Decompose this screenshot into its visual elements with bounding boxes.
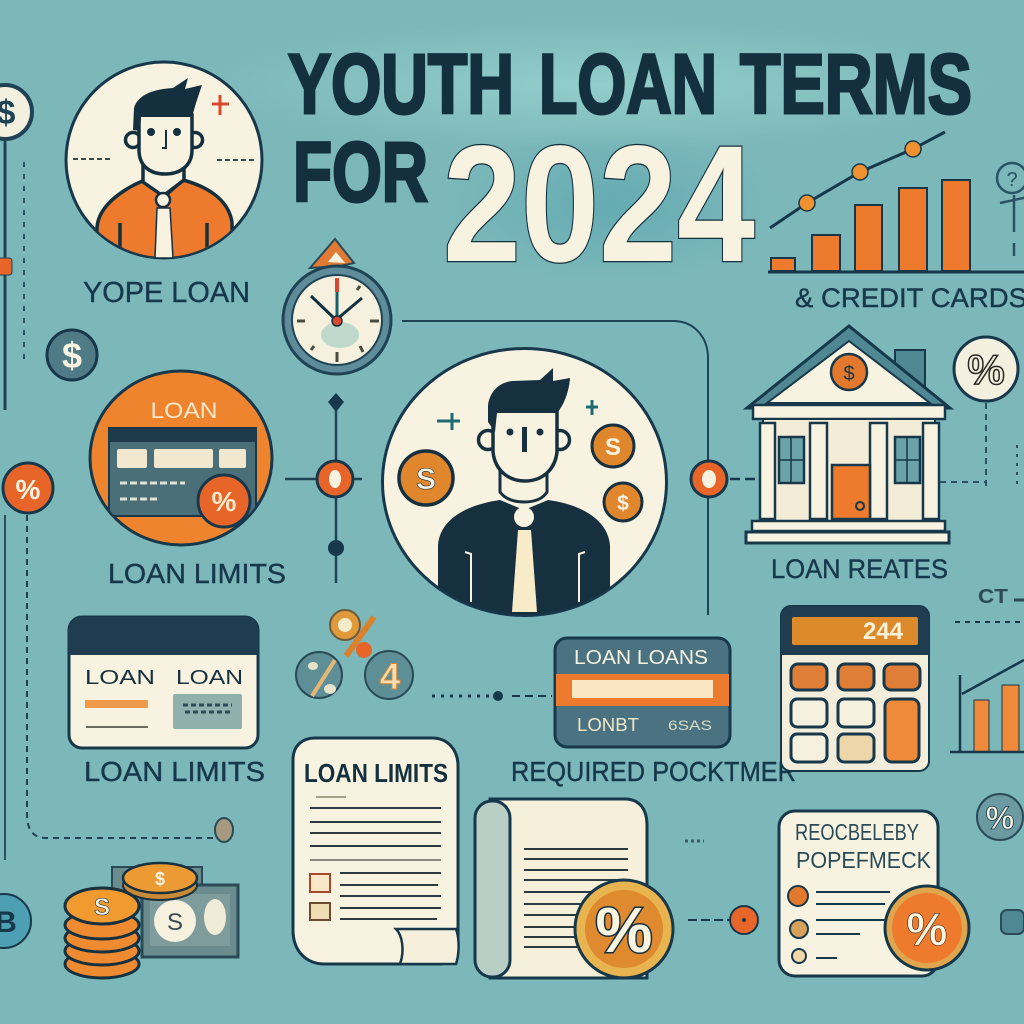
panel: loan table card: [69, 617, 258, 748]
icon: calculator: [781, 606, 929, 771]
icon: percent circle: %: [967, 346, 1005, 393]
panel: loan limits document: [293, 738, 459, 964]
icon: dollar badge: [0, 85, 32, 139]
icon: clock: [283, 239, 391, 374]
icon: bank building: [746, 326, 950, 543]
icon: coins and cash: $: [155, 869, 165, 889]
timeline node: [285, 393, 362, 583]
windows: [779, 437, 920, 483]
panel: loan table card: LOAN: [85, 667, 155, 689]
icon: right edge badge: [1001, 910, 1024, 934]
label: required pocket: REQUIRED POCKTMER: [511, 756, 796, 787]
icon: coins and cash: S: [94, 894, 110, 921]
panel: central person: [382, 348, 666, 620]
icon: bottom-left badge: [0, 894, 31, 948]
dotted connector: [432, 691, 552, 701]
coin stack: [65, 888, 139, 978]
panel: loans card: 6SAS: [668, 717, 712, 733]
icon: percent badge: [3, 463, 53, 513]
coin upper right: S: [605, 434, 621, 461]
panel: checklist card: POPEFMECK: [796, 847, 932, 873]
percent coin: %: [596, 894, 652, 966]
coin lower right: $: [617, 492, 629, 515]
coin left: S: [416, 463, 436, 496]
icon: right percent badge: [977, 794, 1023, 840]
icon: right percent badge: %: [986, 800, 1014, 836]
panel: loan card: [90, 371, 272, 545]
marker: [215, 818, 233, 842]
columns: [760, 423, 939, 519]
coin upper right: [592, 425, 634, 467]
coin lower right: [604, 483, 642, 521]
panel: loans card: LOAN LOANS: [574, 647, 708, 669]
coin left: [399, 451, 453, 505]
label: loan limits lower: LOAN LIMITS: [84, 756, 265, 787]
label: loan limits upper: LOAN LIMITS: [108, 558, 286, 589]
panel: youth avatar: [66, 62, 262, 262]
connector: clock to bank: [402, 321, 708, 615]
timeline marker: [0, 258, 12, 275]
panel: loan table card: LOAN: [176, 667, 243, 689]
label: loan rates: LOAN REATES: [771, 554, 948, 584]
icon: dollar coin: [47, 330, 97, 380]
icon: coins and cash: S: [167, 909, 183, 936]
icon: bank building: $: [843, 363, 855, 385]
panel: loan card: %: [212, 486, 237, 517]
percent coin: [575, 880, 673, 978]
panel: checklist card: [779, 811, 969, 976]
percent coin: %: [907, 903, 947, 955]
left timeline: [0, 85, 32, 860]
icon: lightbulb: [997, 163, 1024, 256]
title word for: FOR: [293, 125, 428, 219]
title word loan: LOAN: [539, 37, 717, 131]
text lines: [310, 797, 441, 919]
percent coin: [885, 886, 969, 970]
small chart fragment: [950, 586, 1024, 752]
icon: percent badge: %: [16, 474, 41, 505]
icon: percent circle: [940, 337, 1018, 490]
person body: [438, 500, 610, 620]
connector and marker: [685, 841, 758, 934]
icon: coins and cash: [65, 863, 238, 978]
panel: loan limits document: LOAN LIMITS: [304, 758, 448, 788]
dashed connector: [27, 515, 215, 838]
icon: dollar coin: $: [62, 335, 82, 376]
connector node: [691, 461, 756, 497]
panel: loans card: [555, 638, 730, 747]
label: credit cards: & CREDIT CARDS: [795, 283, 1024, 313]
small chart fragment: CT: [978, 586, 1008, 608]
label: yope loan: YOPE LOAN: [83, 277, 250, 309]
icon: percent coins: 4: [380, 656, 401, 697]
bullets: [788, 886, 890, 963]
chart: growth bars and trend: [768, 132, 1024, 272]
panel: scroll document with percent: [475, 799, 673, 978]
icon: calculator: 244: [863, 618, 904, 645]
panel: loan card: LOAN: [150, 398, 218, 423]
icon: percent coins: [296, 610, 413, 699]
door: [832, 465, 870, 519]
title year: 2024: [443, 112, 755, 297]
title word youth: YOUTH: [288, 37, 514, 131]
panel: checklist card: REOCBELEBY: [795, 819, 919, 845]
buttons: [791, 664, 920, 762]
title: [288, 37, 972, 297]
icon: lightbulb: ?: [1006, 169, 1018, 191]
panel: loans card: LONBT: [577, 715, 639, 735]
